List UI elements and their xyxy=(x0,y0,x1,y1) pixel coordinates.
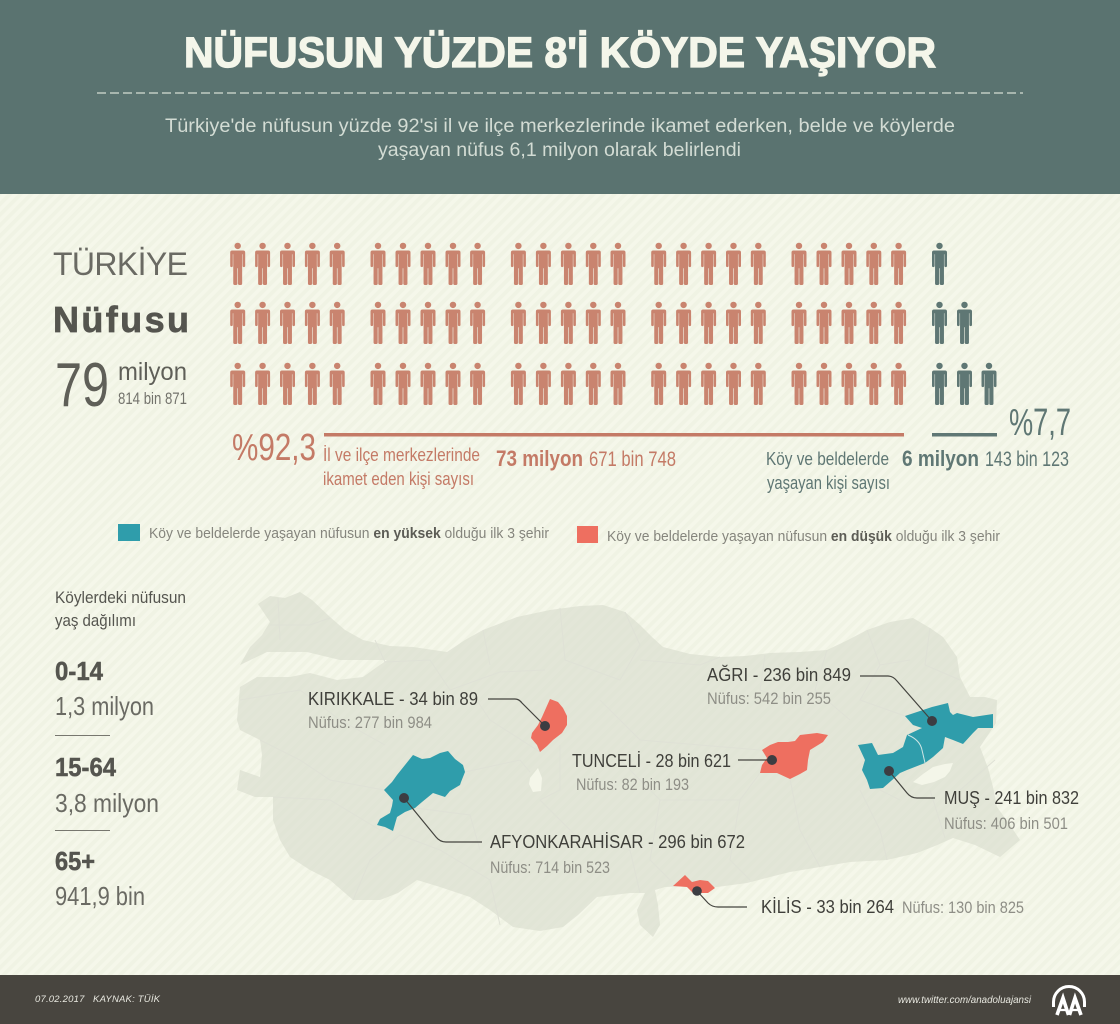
label: Tunceli xyxy=(572,751,777,794)
label: Ağrı: Nüfus: 542 bin 255 xyxy=(707,689,831,708)
label: Kilis: KİLİS - 33 bin 264 xyxy=(761,897,894,917)
province: Kilis xyxy=(673,875,715,893)
label: Tunceli: Nüfus: 82 bin 193 xyxy=(576,775,689,794)
urban statistic: %92,3 xyxy=(232,427,316,469)
label: Tunceli: TUNCELİ - 28 bin 621 xyxy=(572,751,731,771)
province: Ağrı and Muş xyxy=(858,703,993,789)
label: Kırıkkale: Nüfus: 277 bin 984 xyxy=(308,713,432,732)
header band xyxy=(0,0,1120,194)
province: Kırıkkale xyxy=(531,699,567,752)
label: Afyonkarahisar: AFYONKARAHİSAR - 296 bin 672 xyxy=(490,832,745,852)
footer: 07.02.2017 KAYNAK: TÜİK xyxy=(35,994,161,1005)
rural statistic: yaşayan kişi sayısı xyxy=(767,473,890,493)
total population block: Nüfusu xyxy=(53,299,189,340)
age distribution: 65+ xyxy=(55,846,95,876)
subtitle xyxy=(165,116,955,161)
label: Kırıkkale: KIRIKKALE - 34 bin 89 xyxy=(308,689,478,709)
total population block: 814 bin 871 xyxy=(118,389,187,408)
label: Ağrı: AĞRI - 236 bin 849 xyxy=(707,664,851,685)
age distribution: 1,3 milyon xyxy=(55,691,154,721)
footer: www.twitter.com/anadoluajansi xyxy=(898,995,1032,1006)
urban statistic: İl ve ilçe merkezlerinde xyxy=(323,445,480,465)
icon: AA logo xyxy=(1054,986,1084,1015)
map of Turkey xyxy=(237,592,1020,937)
age distribution: Köylerdeki nüfusun xyxy=(55,588,186,607)
label: Muş: Nüfus: 406 bin 501 xyxy=(944,814,1068,833)
urban statistic: 671 bin 748 xyxy=(589,448,676,471)
title: NÜFUSUN YÜZDE 8'İ KÖYDE YAŞIYOR xyxy=(184,29,936,77)
total population block: 79 xyxy=(55,351,109,420)
legend: Köy ve beldelerde yaşayan nüfusun en düşük olduğu ilk 3 şehir xyxy=(607,528,1000,545)
age distribution: 941,9 bin xyxy=(55,881,145,911)
age distribution: yaş dağılımı xyxy=(55,611,136,630)
label: Ağrı xyxy=(707,664,937,726)
total population block xyxy=(53,246,189,420)
label: Afyonkarahisar: Nüfus: 714 bin 523 xyxy=(490,858,610,877)
icon grid: rural population people xyxy=(932,243,996,405)
rural statistic xyxy=(766,402,1071,493)
province: Tunceli xyxy=(760,733,828,779)
age distribution: 15-64 xyxy=(55,752,116,782)
icon grid: urban population people xyxy=(230,243,906,405)
rural statistic: Köy ve beldelerde xyxy=(766,449,889,469)
age distribution: 3,8 milyon xyxy=(55,788,159,818)
age distribution: 0-14 xyxy=(55,656,103,686)
subtitle: yaşayan nüfus 6,1 milyon olarak belirlendi xyxy=(378,140,741,161)
age distribution xyxy=(55,588,186,911)
label: Muş xyxy=(884,766,1079,833)
footer xyxy=(0,975,1120,1024)
lakes xyxy=(529,763,953,792)
rural statistic: 143 bin 123 xyxy=(985,448,1069,471)
label: Afyonkarahisar xyxy=(399,793,745,877)
label: Kilis: Nüfus: 130 bin 825 xyxy=(902,898,1024,917)
rural statistic: 6 milyon xyxy=(902,446,979,471)
province: Afyonkarahisar xyxy=(377,751,465,831)
total population block: milyon xyxy=(118,358,187,386)
urban statistic: ikamet eden kişi sayısı xyxy=(323,469,474,489)
legend xyxy=(118,524,1000,545)
total population block: TÜRKİYE xyxy=(53,246,188,282)
urban statistic xyxy=(232,427,904,489)
label: Muş: MUŞ - 241 bin 832 xyxy=(944,788,1079,808)
rural statistic: %7,7 xyxy=(1009,402,1071,444)
urban statistic: 73 milyon xyxy=(496,446,583,471)
label: Kırıkkale xyxy=(308,689,550,732)
label: Kilis xyxy=(692,886,1024,917)
subtitle: Türkiye'de nüfusun yüzde 92'si il ve ilçe merkezlerinde ikamet ederken, belde ve köylerde xyxy=(165,116,955,137)
legend: Köy ve beldelerde yaşayan nüfusun en yüksek olduğu ilk 3 şehir xyxy=(149,525,549,542)
